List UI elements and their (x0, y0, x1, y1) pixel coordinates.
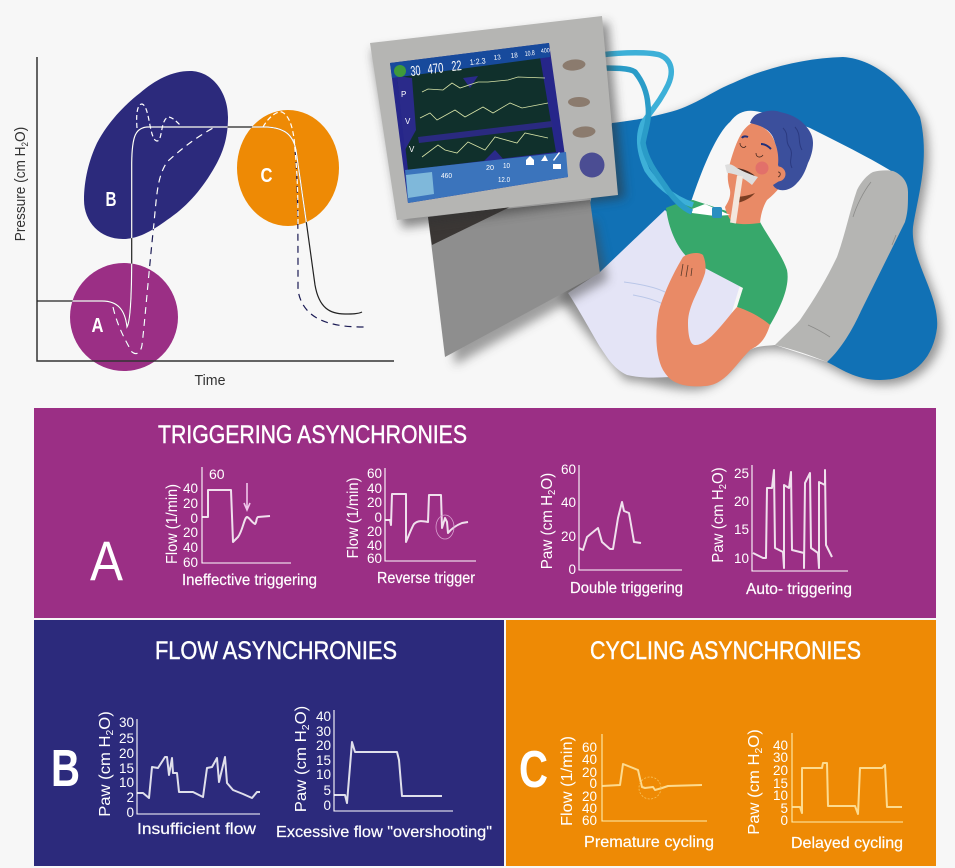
chart: double triggering: 2 (547, 490, 558, 495)
pressure curves outside zones (37, 127, 368, 354)
mouth tape (725, 164, 758, 185)
chart: premature cycling: 20 (582, 789, 597, 804)
chart: ineffective triggering: 60 (183, 555, 198, 570)
chart: double triggering: 40 (561, 495, 576, 510)
tube connector (692, 204, 730, 216)
chart: insufficient flow: 0 (126, 805, 134, 820)
chart: auto-triggering (710, 465, 852, 598)
chart: auto-triggering: 25 (734, 466, 749, 481)
ear (770, 166, 786, 182)
chart: excessive flow: Excessive flow "overshooting" (276, 824, 492, 841)
chart: excessive flow: 5 (323, 783, 331, 798)
panel: triggering asynchronies (34, 408, 936, 618)
chart: ineffective triggering (164, 466, 317, 589)
chart: auto-triggering: 15 (734, 522, 749, 537)
chart: ineffective triggering: 20 (183, 525, 198, 540)
waveform channel labels: P (401, 90, 406, 99)
chart: double triggering: 20 (561, 529, 576, 544)
chart: insufficient flow: 2 (126, 790, 134, 805)
chart: delayed cycling: 40 (773, 738, 788, 753)
x axis title: Time (194, 372, 226, 389)
breathing circuit tubes (600, 53, 693, 212)
chart: ineffective triggering: 40 (183, 481, 198, 496)
endotracheal tube (733, 176, 740, 223)
y axis title: O) (12, 127, 29, 142)
chart: reverse trigger: Flow (1/min) (345, 478, 362, 558)
chart: premature cycling: 40 (582, 752, 597, 767)
brows (742, 136, 771, 149)
blue blob background (590, 57, 937, 380)
waveform channel labels (401, 90, 415, 154)
chart: excessive flow: Paw (cm H (292, 730, 310, 812)
chart: ineffective triggering: Flow (1/min) (164, 484, 181, 564)
highlight circle (639, 777, 661, 799)
chart: excessive flow: 30 (316, 724, 331, 739)
chart: excessive flow: O) (292, 706, 310, 724)
chart: double triggering: 60 (561, 462, 576, 477)
pillow white area (690, 111, 893, 362)
status numbers: 470 (427, 59, 444, 77)
control readouts: 460 (441, 173, 452, 180)
chart: delayed cycling: O) (745, 729, 763, 748)
neck and face (725, 123, 783, 224)
panel A letter: A (90, 529, 124, 592)
chart: delayed cycling: 2 (754, 747, 765, 753)
chart: reverse trigger: Reverse trigger (377, 570, 476, 587)
ventilator stand (428, 200, 600, 357)
purple band (418, 121, 553, 143)
blob shadow (560, 62, 942, 390)
chart: reverse trigger (345, 466, 476, 587)
status numbers: 18 (510, 52, 518, 60)
zone letter C: C (260, 165, 272, 187)
y axis title: 2 (20, 142, 30, 146)
panel A heading: TRIGGERING ASYNCHRONIES (158, 421, 467, 449)
chart: ineffective triggering: 0 (190, 511, 198, 526)
panel C letter: C (519, 741, 548, 799)
status numbers: 13 (493, 54, 501, 62)
chart: reverse trigger: 40 (367, 481, 382, 496)
grey pillow (775, 170, 908, 362)
chart: reverse trigger: 60 (367, 551, 382, 566)
highlight circle (436, 515, 454, 539)
chart: insufficient flow: 10 (119, 775, 134, 790)
chart: excessive flow: 0 (323, 798, 331, 813)
pressure-time chart (12, 57, 394, 389)
mouth (737, 168, 755, 176)
status numbers (410, 48, 551, 79)
chart: auto-triggering: Paw (cm H (710, 489, 727, 563)
panel A background (34, 408, 936, 618)
chart: double triggering (539, 462, 683, 597)
chart: insufficient flow: 2 (105, 729, 116, 735)
chart: delayed cycling: 15 (773, 776, 788, 791)
pillow creases (808, 182, 896, 337)
arm (656, 253, 770, 386)
blanket (568, 210, 740, 385)
ventilator shadow (372, 22, 625, 228)
screen frame (390, 43, 568, 203)
chart: double triggering: Double triggering (570, 580, 683, 597)
status numbers: 30 (410, 62, 421, 79)
waveform area (397, 57, 556, 170)
chart: delayed cycling: 10 (773, 788, 788, 803)
chart: auto-triggering: O) (710, 467, 727, 484)
chart: excessive flow: 40 (316, 709, 331, 724)
chart: excessive flow: 20 (316, 738, 331, 753)
chart: delayed cycling: Delayed cycling (791, 835, 903, 852)
waveform channel labels: V (409, 145, 415, 154)
mode indicator (394, 65, 406, 77)
chart: premature cycling (559, 734, 714, 851)
chart: delayed cycling (745, 729, 903, 852)
chart: reverse trigger: 60 (367, 466, 382, 481)
cheek (756, 162, 768, 174)
top status bar (390, 43, 550, 78)
ventilator body (370, 16, 618, 220)
zone letter A: A (92, 315, 104, 337)
chart: premature cycling: 60 (582, 740, 597, 755)
neck shadow (735, 193, 755, 203)
chart: delayed cycling: 30 (773, 750, 788, 765)
panel C background (506, 620, 936, 866)
bottom control bar (405, 152, 568, 203)
chart: double triggering: Paw (cm H (539, 495, 556, 569)
control readouts: 12.0 (498, 177, 510, 184)
status numbers: 1:2.3 (469, 56, 487, 67)
chart: insufficient flow: Paw (cm H (96, 735, 114, 817)
status numbers: 10.8 (524, 50, 535, 58)
y axis title: Pressure (cm H (12, 146, 29, 241)
chart: insufficient flow: 25 (119, 731, 134, 746)
chart: delayed cycling: 0 (780, 813, 788, 828)
stand dark wedge (428, 207, 510, 245)
chart: premature cycling: 60 (582, 813, 597, 828)
hair (750, 111, 813, 190)
hair curls (783, 127, 802, 168)
arrow (244, 483, 250, 510)
illustration: patient on ventilator (370, 16, 942, 390)
ventilator buttons (562, 59, 604, 178)
status numbers: 400 (541, 48, 551, 55)
zone A circle (70, 263, 178, 371)
chart: excessive flow: 10 (316, 767, 331, 782)
control readouts: 10 (503, 163, 510, 170)
ventilator screen (390, 43, 568, 203)
panel: cycling asynchronies (506, 620, 936, 866)
panel C heading: CYCLING ASYNCHRONIES (590, 637, 861, 665)
fingers (681, 264, 692, 277)
chart: excessive flow: 2 (301, 724, 312, 730)
chart: insufficient flow: Insufficient flow (137, 821, 256, 838)
patient info tile (406, 172, 434, 198)
chart: reverse trigger: 20 (367, 524, 382, 539)
pressure curves inside zones (72, 103, 307, 354)
green shirt (666, 200, 788, 325)
chart: auto-triggering: 2 (718, 484, 729, 489)
chart: excessive flow: 15 (316, 753, 331, 768)
chart: premature cycling: Flow (1/min) (559, 736, 576, 826)
chart: double triggering: O) (539, 473, 556, 490)
chart: auto-triggering: 20 (734, 494, 749, 509)
chart: reverse trigger: 20 (367, 495, 382, 510)
zone C ellipse (237, 110, 339, 226)
panel B heading: FLOW ASYNCHRONIES (155, 637, 397, 665)
chart: ineffective triggering: 20 (183, 496, 198, 511)
status numbers: 22 (451, 57, 462, 74)
chart: insufficient flow: 20 (119, 746, 134, 761)
chart: insufficient flow: 30 (119, 715, 134, 730)
chart: premature cycling: 40 (582, 801, 597, 816)
panel: flow asynchronies (34, 620, 504, 866)
home and tool icons (526, 152, 561, 169)
zone B shape (84, 71, 228, 239)
chart: delayed cycling: 20 (773, 763, 788, 778)
chart: double triggering: 0 (568, 562, 576, 577)
panel B letter: B (51, 740, 80, 798)
chart: delayed cycling: Paw (cm H (745, 753, 763, 835)
chart: insufficient flow (96, 711, 260, 838)
chart: premature cycling: 20 (582, 765, 597, 780)
chart: excessive flow (276, 706, 492, 841)
control readouts: 20 (486, 165, 494, 172)
chart: ineffective triggering: 40 (183, 540, 198, 555)
chart: delayed cycling: 5 (780, 801, 788, 816)
chart: insufficient flow: 15 (119, 761, 134, 776)
blanket folds (624, 282, 665, 304)
ventilator stand shadow (440, 220, 608, 365)
chart: ineffective triggering: 60 (209, 466, 225, 482)
chart: ineffective triggering: Ineffective triggering (182, 572, 317, 589)
chart: auto-triggering: 10 (734, 551, 749, 566)
chart: premature cycling: Premature cycling (584, 834, 714, 851)
zone letter B: B (106, 189, 116, 211)
chart: reverse trigger: 40 (367, 538, 382, 553)
chart axes (37, 57, 394, 361)
connector fitting (712, 207, 722, 218)
purple patches (397, 76, 505, 168)
chart: reverse trigger: 0 (374, 510, 382, 525)
closed eye lines (740, 143, 780, 177)
chart: insufficient flow: O) (96, 711, 114, 730)
chart: premature cycling: 0 (589, 776, 597, 791)
waveform channel labels: V (405, 117, 411, 126)
chart: auto-triggering: Auto- triggering (746, 581, 852, 598)
panel B background (34, 620, 504, 866)
control readouts (441, 163, 510, 184)
screen waveforms (420, 77, 548, 157)
